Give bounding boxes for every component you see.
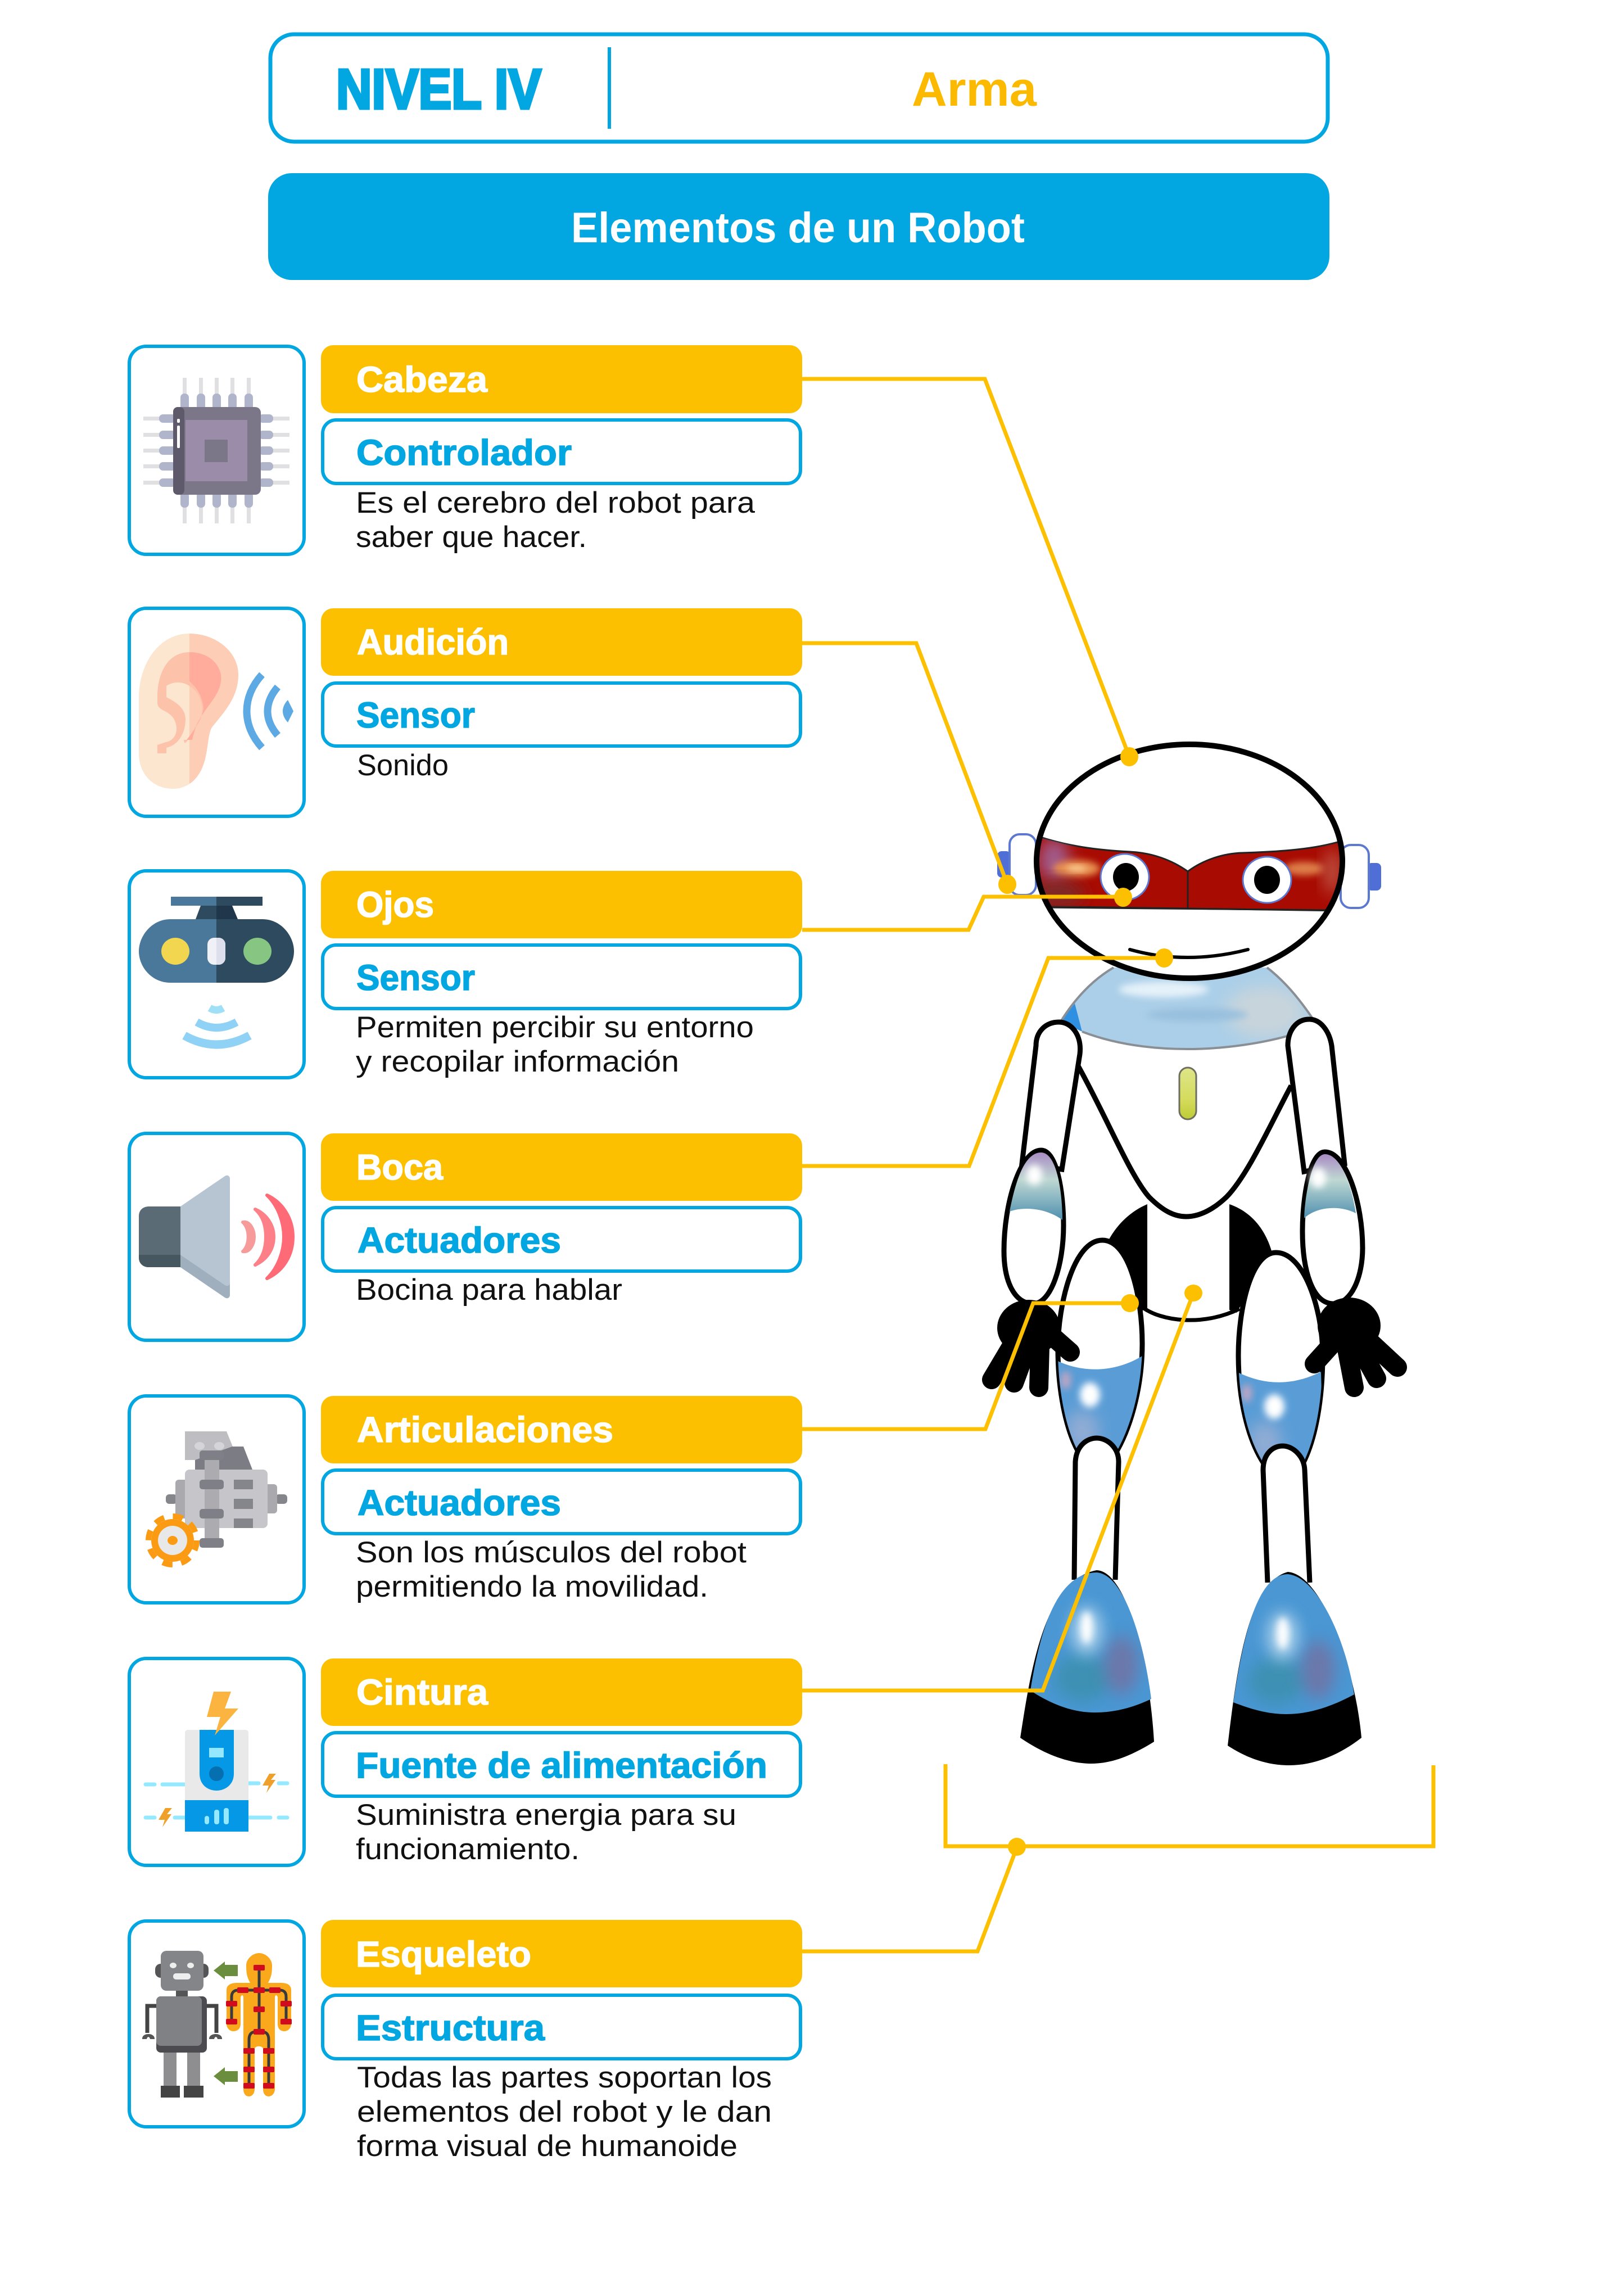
description [356,1011,754,1078]
robot left leg [1020,1240,1154,1764]
level label: NIVEL IV [336,58,541,121]
heading bar: Cabeza [356,359,487,400]
component label: Actuadores [358,1220,561,1260]
heading bar: Ojos [356,884,434,925]
robot mouth [1130,950,1248,957]
robot illustration [992,744,1397,1765]
description: saber que hacer. [356,521,587,554]
description [356,486,755,554]
robot right eye [1243,857,1291,903]
heading bar [321,1396,802,1463]
robot head [1038,745,1341,977]
description: Bocina para hablar [356,1273,622,1307]
heading bar: Esqueleto [356,1934,531,1974]
robot torso [1078,1066,1291,1217]
heading bar [321,1920,802,1987]
robot left hand [992,1300,1070,1387]
icon: power supply [146,1692,287,1832]
robot right ear [1341,845,1381,908]
component label: Estructura [356,2008,545,2048]
description: permitiendo la movilidad. [356,1570,708,1603]
icon: speaker [139,1176,293,1298]
component label: Sensor [356,695,475,735]
header: level and topic [270,34,1328,142]
panel: Audición [129,608,802,816]
icon: camera sensor [139,897,294,1045]
description: forma visual de humanoide [357,2130,738,2163]
description [357,2061,772,2163]
icon: ear with sound waves [135,630,293,793]
topic label: Arma [912,62,1037,116]
description: Sonido [357,749,449,782]
robot mask [1029,837,1341,911]
description: Permiten percibir su entorno [356,1011,754,1044]
component label [323,945,800,1009]
robot right hand [1314,1298,1397,1387]
description: elementos del robot y le dan [357,2095,772,2128]
robot left ear [997,834,1036,895]
connector: Articulaciones [802,1294,1139,1429]
connector: Boca [802,948,1173,1166]
component label: Fuente de alimentación [356,1745,767,1786]
heading bar: Boca [356,1147,443,1187]
heading bar [321,871,802,938]
icon: microchip [143,378,289,523]
description [356,1536,747,1603]
connector: Esqueleto [802,1764,1433,1951]
heading bar [321,345,802,413]
panel: Esqueleto [129,1920,802,2163]
icon: motor with gear [148,1431,287,1565]
description: funcionamiento. [356,1833,580,1866]
panel: Cintura [129,1658,802,1866]
component label [323,683,800,746]
heading bar [321,1658,802,1726]
component label [323,1208,800,1271]
robot left eye [1101,854,1149,900]
description [356,1798,736,1866]
description: Son los músculos del robot [356,1536,747,1569]
description: y recopilar información [356,1045,679,1078]
chest light [1179,1068,1196,1119]
title banner [268,173,1329,280]
heading bar: Cintura [356,1672,488,1712]
component label [323,1470,800,1534]
panel: Boca [129,1133,802,1340]
connector: Ojos [802,888,1132,930]
robot arms [1004,1019,1363,1304]
component label: Sensor [356,957,475,998]
connector: Cabeza [802,379,1138,766]
component label: Controlador [356,432,572,473]
heading bar: Articulaciones [357,1409,613,1450]
heading bar: Audición [357,622,509,662]
panel: Ojos [129,871,802,1078]
description: Todas las partes soportan los [357,2061,772,2094]
title banner: Elementos de un Robot [571,204,1025,252]
robot collar [1061,968,1312,1049]
panel: Articulaciones [129,1396,802,1603]
robot right leg [1228,1253,1361,1765]
heading bar [321,608,802,676]
heading bar [321,1133,802,1201]
connector: Cintura [802,1285,1202,1691]
panel: Cabeza [129,345,802,554]
component label [323,1995,800,2059]
component label [323,1733,800,1796]
component label: Actuadores [358,1483,561,1523]
connector: Audición [802,643,1016,894]
icon: robot and human skeleton [142,1951,292,2098]
description: Es el cerebro del robot para [356,486,755,519]
description: Suministra energia para su [356,1798,736,1832]
component label [323,420,800,483]
robot pelvis [1091,1204,1272,1320]
